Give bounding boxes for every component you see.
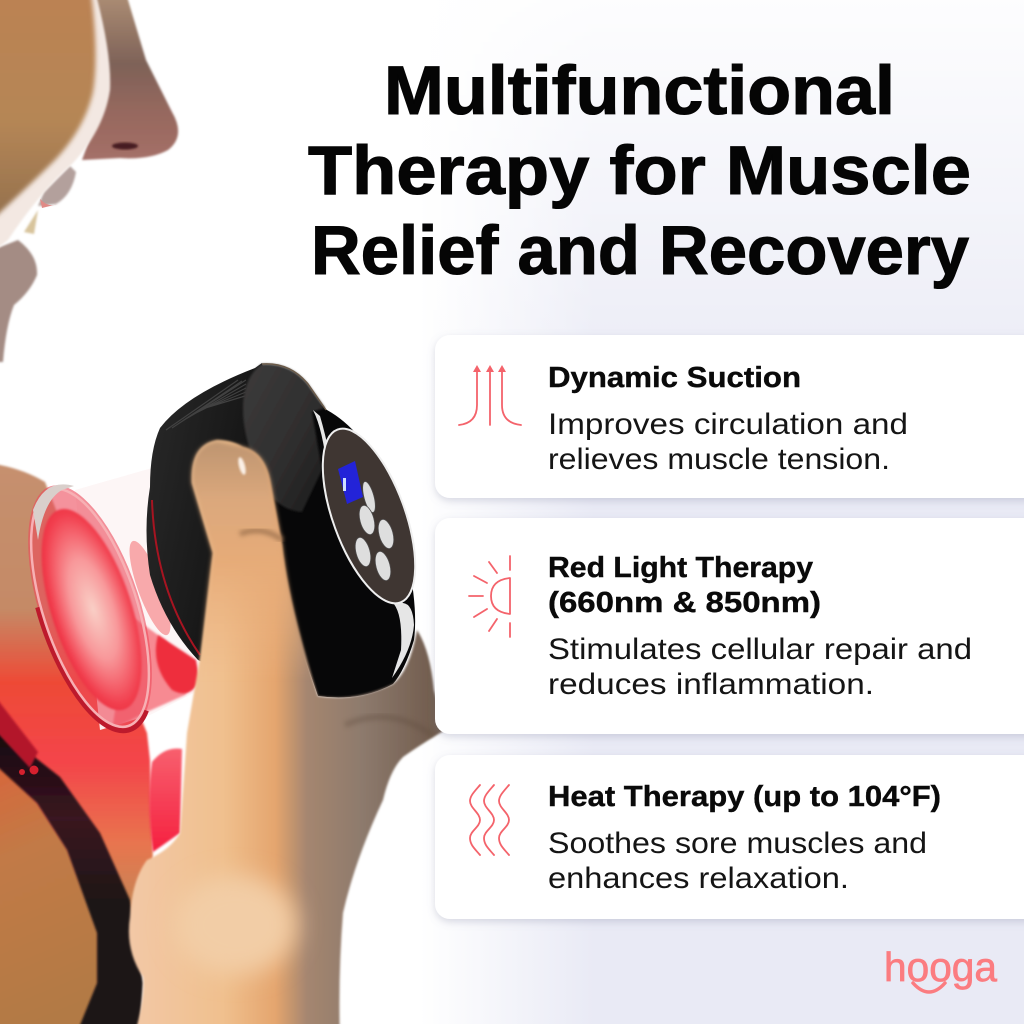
clear suction cup — [3, 468, 200, 745]
photo: hand holding device — [129, 440, 445, 1024]
title: Therapy for Muscle — [308, 132, 971, 209]
text: heat therapy description: enhances relaxation. — [548, 862, 849, 895]
text: dynamic suction description — [548, 408, 908, 476]
buttons — [352, 480, 397, 582]
title: Multifunctional — [384, 52, 895, 129]
logo: hooga: hooga — [884, 944, 997, 990]
icon: upward suction arrows — [459, 365, 521, 425]
heading: red light therapy: Red Light Therapy — [548, 552, 813, 584]
panel: dynamic suction — [435, 335, 1024, 498]
photo: shoulder and chest — [0, 462, 182, 1024]
control panel — [304, 417, 434, 615]
text: red light therapy description: Stimulates cellular repair and — [548, 633, 972, 666]
heading: red light therapy: (660nm & 850nm) — [548, 587, 821, 619]
title: Relief and Recovery — [311, 212, 969, 289]
heading: red light therapy — [548, 552, 821, 619]
finger behind cup — [149, 749, 182, 852]
dome — [243, 364, 325, 512]
panel: red light therapy — [435, 518, 1024, 734]
heading: dynamic suction: Dynamic Suction — [548, 362, 801, 394]
text: heat therapy description: Soothes sore muscles and — [548, 827, 927, 860]
text: heat therapy description — [548, 827, 927, 895]
icon: heat waves — [470, 785, 509, 855]
text: red light therapy description: reduces inflammation. — [548, 668, 874, 701]
ribbed rubber base — [146, 363, 300, 668]
blue display — [338, 461, 363, 504]
bra strap — [0, 722, 143, 1024]
text: red light therapy description — [548, 633, 972, 701]
photo: massage device — [3, 363, 434, 745]
white gloss highlight — [313, 410, 414, 678]
text: dynamic suction description: Improves circulation and — [548, 408, 908, 441]
icon: half sun — [469, 556, 510, 637]
glossy black body — [250, 380, 415, 698]
heading: heat therapy: Heat Therapy (up to 104°F) — [548, 781, 941, 813]
photo: face in profile — [0, 0, 178, 362]
panel: heat therapy — [435, 755, 1024, 919]
text: dynamic suction description: relieves muscle tension. — [548, 443, 890, 476]
title — [308, 52, 971, 289]
